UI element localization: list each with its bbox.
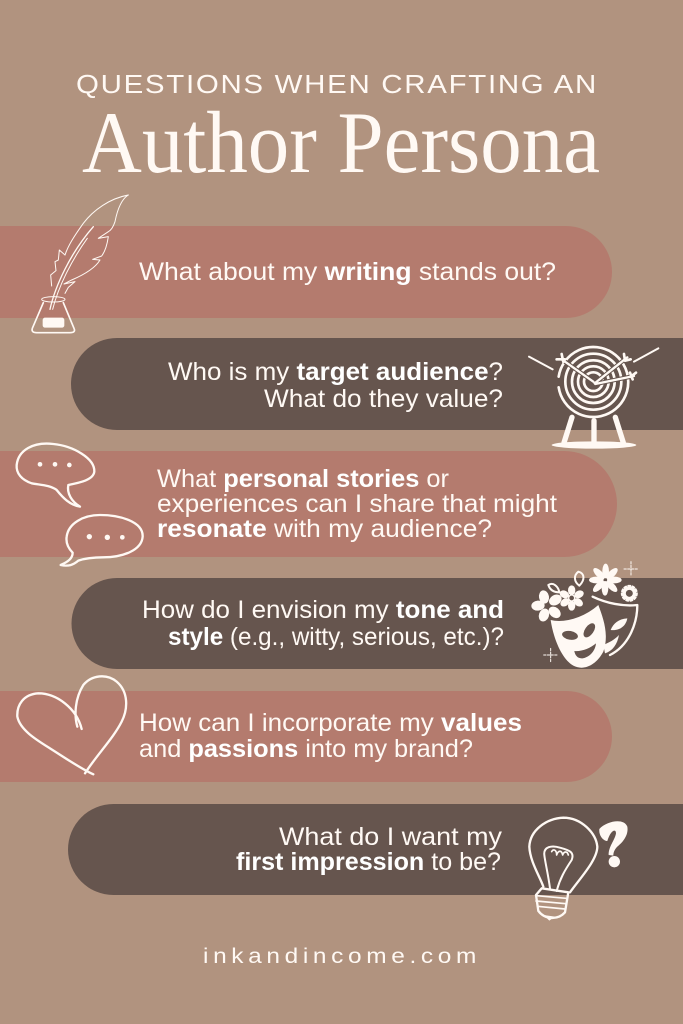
band: rose xyxy=(0,226,612,318)
panel: question 3 stories xyxy=(0,444,617,566)
panel: question 4 tone xyxy=(72,562,683,669)
band: dark xyxy=(71,338,683,430)
band: rose xyxy=(0,691,612,782)
band: rose xyxy=(0,451,617,557)
question text xyxy=(236,823,503,876)
icon: light bulb and question mark xyxy=(529,818,628,921)
question text: How do I envision my tone and xyxy=(142,596,504,624)
title xyxy=(76,69,600,192)
icon: hand-drawn heart xyxy=(17,676,126,774)
band: dark xyxy=(72,578,683,669)
question text: What do they value? xyxy=(264,385,503,413)
footer: website: inkandincome.com xyxy=(203,945,481,968)
band: dark xyxy=(68,804,683,895)
icon: quill and inkwell xyxy=(32,195,128,333)
question text: resonate with my audience? xyxy=(157,515,492,543)
title line: author persona: Author Persona xyxy=(82,95,600,192)
question text: What do I want my xyxy=(279,823,503,851)
question text: What personal stories or xyxy=(157,465,449,493)
question text: What about my writing stands out? xyxy=(139,258,556,286)
icon: target with arrows xyxy=(529,347,658,449)
question text xyxy=(139,709,522,763)
question text xyxy=(142,596,504,651)
question text xyxy=(168,358,503,413)
question text: How can I incorporate my values xyxy=(139,709,522,737)
panel: question 1 writing xyxy=(0,195,612,333)
question text: style (e.g., witty, serious, etc.)? xyxy=(168,623,504,651)
question text: Who is my target audience ? xyxy=(168,358,503,386)
panel: question 2 audience xyxy=(71,338,683,449)
title line: questions when crafting an: QUESTIONS WHEN CRAFTING AN xyxy=(76,69,598,99)
panel: question 5 values xyxy=(0,676,612,782)
question text: and passions into my brand? xyxy=(139,735,473,763)
icon: theatre masks with flowers xyxy=(531,562,638,668)
panel: question 6 first impression xyxy=(68,804,683,921)
question text xyxy=(157,465,557,543)
icon: speech bubbles xyxy=(17,444,143,566)
question text: experiences can I share that might xyxy=(157,490,557,518)
question text: first impression to be? xyxy=(236,848,501,876)
